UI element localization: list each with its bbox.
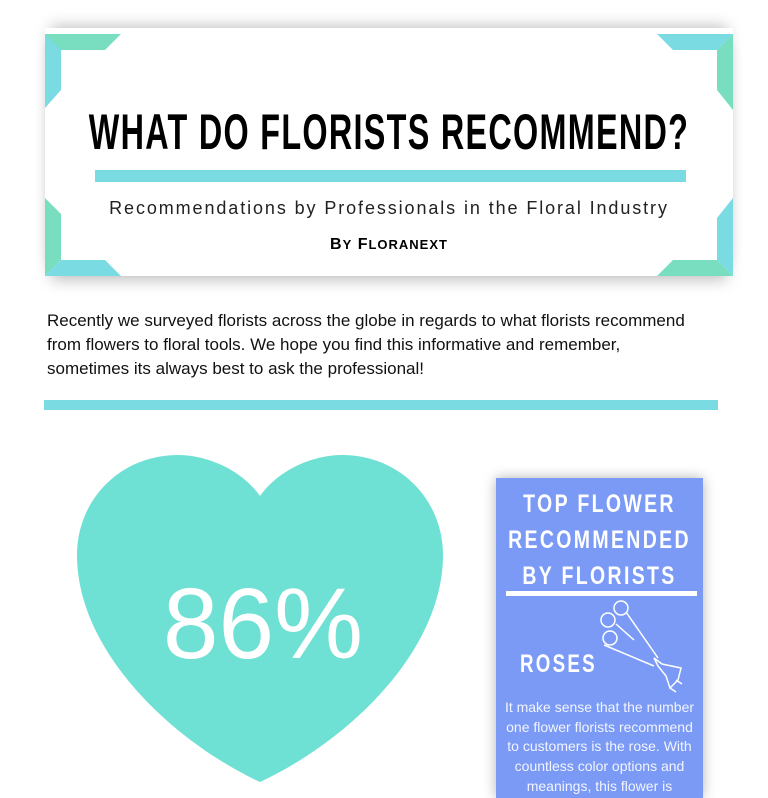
panel: top flower	[496, 478, 703, 798]
panel heading underline	[506, 591, 697, 596]
subtitle: Recommendations by Professionals in the Floral Industry	[109, 198, 669, 218]
stat number: 86%	[163, 568, 363, 680]
corner decorations	[45, 34, 733, 276]
panel description: It make sense that the number one flower florists recommend to customers is the rose. With countless color options and meanings, this flower is	[505, 699, 694, 794]
flower name: ROSES	[520, 650, 597, 678]
icon: bouquet	[600, 600, 682, 692]
intro paragraph: sometimes its always best to ask the professional!	[47, 359, 424, 378]
intro paragraph: from flowers to floral tools. We hope you find this informative and remember,	[47, 335, 620, 354]
title: WHAT DO FLORISTS RECOMMEND?	[89, 104, 689, 160]
divider bar	[44, 400, 718, 410]
panel heading: RECOMMENDED	[508, 526, 691, 554]
heart stat	[77, 455, 443, 782]
panel heading	[508, 490, 691, 590]
intro paragraph	[47, 311, 685, 378]
panel heading: TOP FLOWER	[523, 490, 676, 518]
title underline bar	[95, 170, 686, 182]
panel heading: BY FLORISTS	[522, 562, 677, 590]
intro paragraph: Recently we surveyed florists across the globe in regards to what florists recommend	[47, 311, 685, 330]
header panel	[45, 28, 733, 276]
byline: BY FLORANEXT	[330, 236, 448, 253]
